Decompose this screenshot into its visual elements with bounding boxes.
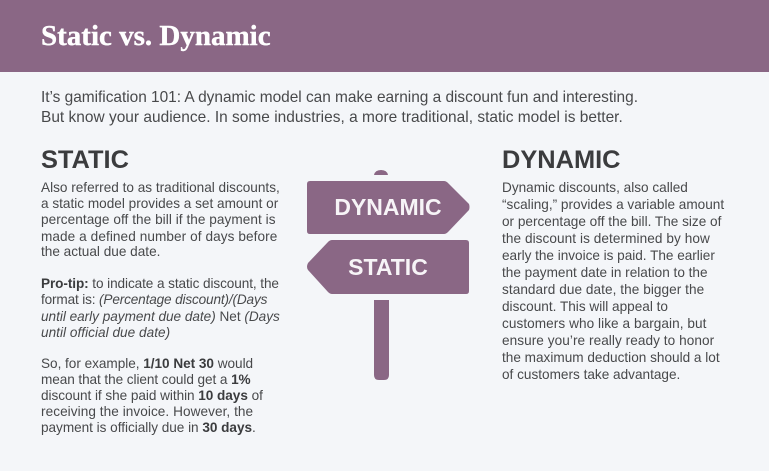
static description: a static model provides a set amount or (41, 196, 278, 211)
dynamic description: Dynamic discounts, also called (502, 180, 688, 195)
panel: static (41, 146, 280, 435)
example text: discount if she paid within 10 days of (41, 388, 263, 403)
pro-tip text: format is: (Percentage discount)/(Days (41, 292, 267, 307)
example text (41, 356, 263, 435)
post top cap (374, 170, 388, 175)
heading: static: STATIC (41, 146, 129, 174)
dynamic description: customers who like a bargain, but (502, 316, 706, 331)
arrow sign: dynamic: DYNAMIC (334, 194, 442, 220)
example text: So, for example, 1/10 Net 30 would (41, 356, 253, 371)
icon: signpost (307, 170, 470, 380)
static description: made a defined number of days before (41, 229, 277, 244)
dynamic description: standard due date, the bigger the (502, 282, 704, 297)
dynamic description: the payment date in relation to the (502, 265, 708, 280)
dynamic description: “scaling,” provides a variable amount (502, 197, 724, 212)
intro text: It’s gamification 101: A dynamic model can make earning a discount fun and interesting. (41, 89, 638, 106)
dynamic description: of customers take advantage. (502, 367, 680, 382)
example text: receiving the invoice. However, the (41, 404, 253, 419)
dynamic description: the maximum deduction should a lot (502, 350, 720, 365)
pro-tip text: until official due date) (41, 325, 170, 340)
dynamic description: ensure you’re really ready to honor (502, 333, 714, 348)
example text: payment is officially due in 30 days. (41, 420, 256, 435)
pro-tip text: Pro-tip: to indicate a static discount, the (41, 276, 279, 291)
dynamic description: discount. This will appeal to (502, 299, 668, 314)
arrow sign: static (307, 240, 469, 294)
post bottom (374, 300, 389, 380)
static description: the actual due date. (41, 244, 160, 259)
dynamic description: early the invoice is paid. The earlier (502, 248, 715, 263)
header banner (0, 0, 769, 72)
pro-tip text (41, 276, 280, 340)
static description: Also referred to as traditional discounts, (41, 180, 280, 195)
intro text: But know your audience. In some industries, a more traditional, static model is better. (41, 109, 623, 126)
title: Static vs. Dynamic (41, 20, 271, 52)
intro text (41, 89, 638, 126)
arrow sign: dynamic (307, 181, 470, 234)
dynamic description: or percentage off the bill. The size of (502, 214, 721, 229)
dynamic description (502, 180, 724, 382)
pro-tip text: until early payment due date) Net (Days (41, 309, 280, 324)
static description: percentage off the bill if the payment is (41, 212, 276, 227)
heading: dynamic: DYNAMIC (502, 146, 620, 174)
arrow sign: static: STATIC (348, 254, 428, 280)
example text: mean that the client could get a 1% (41, 372, 251, 387)
dynamic description: the discount is determined by how (502, 231, 710, 246)
panel: dynamic (502, 146, 724, 382)
static description (41, 180, 280, 259)
